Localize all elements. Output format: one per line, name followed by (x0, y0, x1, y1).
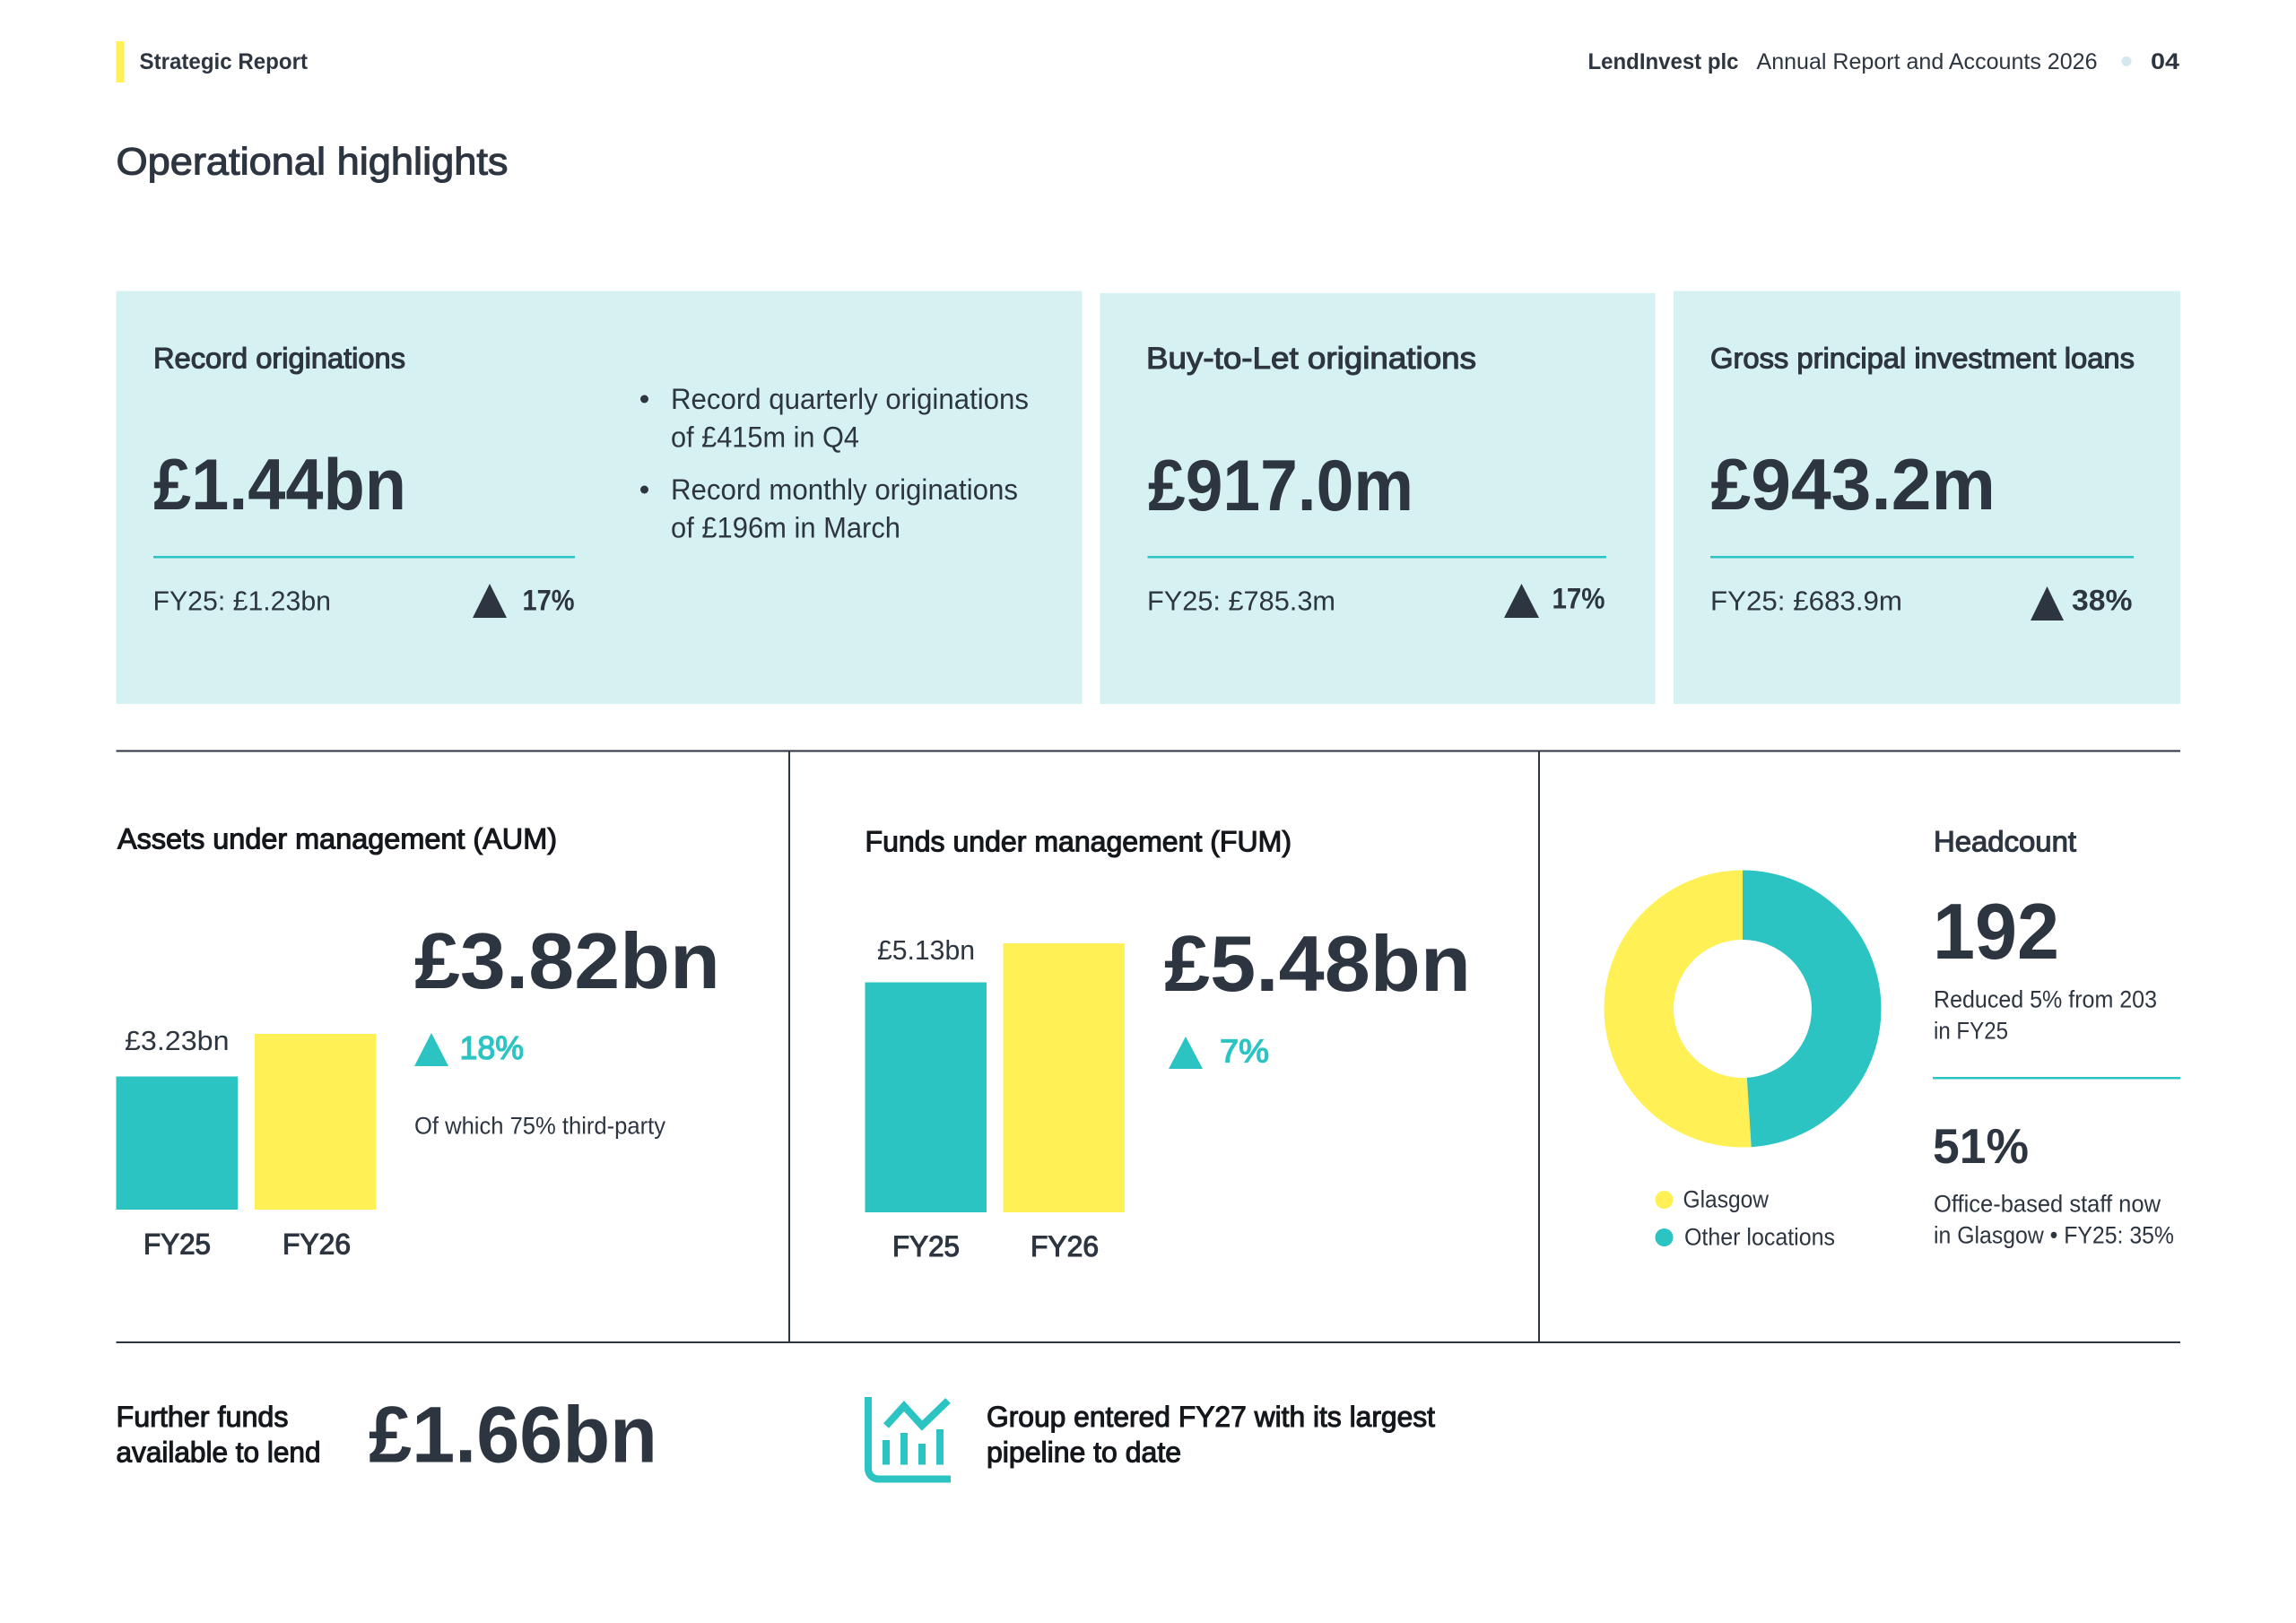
Glasgow share value: 51% (1933, 1118, 2029, 1174)
icon: growth chart (865, 1397, 951, 1483)
company name: LendInvest plc (1587, 49, 1739, 74)
panel: record originations (117, 291, 1082, 704)
heading: Record originations (153, 343, 405, 375)
Glasgow share note: in Glasgow • FY25: 35% (1934, 1221, 2174, 1248)
main value: £917.0m (1148, 446, 1413, 526)
bar chart: FUM: FY26 (1031, 1230, 1099, 1263)
pipeline text: pipeline to date (987, 1436, 1181, 1469)
prior year: FY25: £1.23bn (152, 585, 331, 617)
headcount value: 192 (1933, 887, 2059, 976)
pipeline text: Group entered FY27 with its largest (987, 1401, 1435, 1433)
icon: up triangle (2031, 586, 2064, 621)
divider (153, 556, 575, 558)
bar chart: AUM: FY25 (144, 1228, 211, 1261)
change: 18% (459, 1029, 524, 1066)
section label: Strategic Report (140, 49, 309, 74)
Glasgow share note: Office-based staff now (1934, 1191, 2161, 1218)
label: Further funds (117, 1401, 289, 1433)
main value: £943.2m (1711, 445, 1996, 525)
headcount note: in FY25 (1934, 1017, 2008, 1044)
divider (1933, 1077, 2180, 1080)
page header (117, 41, 2179, 82)
change: 17% (1552, 583, 1605, 615)
heading: Gross principal investment loans (1710, 343, 2135, 375)
change: 38% (2072, 585, 2133, 617)
headcount note: Reduced 5% from 203 (1934, 986, 2157, 1013)
bullet list: Record monthly originations (671, 473, 1018, 506)
icon: up triangle (473, 584, 507, 618)
bullet list (640, 383, 1029, 543)
heading: Assets under management (AUM) (117, 823, 557, 855)
bar chart: AUM: £3.23bn (125, 1025, 230, 1056)
panel: buy-to-let originations (1100, 293, 1656, 704)
donut chart (1604, 870, 1882, 1148)
panel: funds under management (865, 825, 1471, 1263)
report title: Annual Report and Accounts 2026 (1756, 49, 2097, 74)
bar chart: FUM (865, 934, 1125, 1263)
panel: headcount (1604, 825, 2180, 1250)
label: available to lend (117, 1436, 321, 1469)
legend (1656, 1185, 1835, 1250)
main value: £1.44bn (153, 445, 406, 525)
panel: assets under management (117, 823, 720, 1261)
heading: Buy-to-Let originations (1146, 342, 1476, 376)
divider (1710, 556, 2134, 558)
prior year: FY25: £683.9m (1710, 585, 1902, 617)
bar chart: FUM: £5.13bn (877, 934, 975, 966)
bullet list: Record quarterly originations (671, 383, 1029, 415)
value: £1.66bn (369, 1390, 657, 1480)
panel: gross principal investment loans (1674, 291, 2180, 704)
heading: Headcount (1934, 825, 2076, 857)
header separator dot (2122, 56, 2131, 66)
bar chart: FUM: FY25 (892, 1230, 960, 1263)
label (117, 1401, 321, 1469)
pipeline callout (865, 1397, 1435, 1483)
prior year: FY25: £785.3m (1147, 585, 1335, 617)
main value: £5.48bn (1164, 919, 1471, 1008)
change: 17% (522, 585, 574, 617)
pipeline text (987, 1401, 1435, 1469)
icon: up triangle (414, 1033, 448, 1066)
further funds callout (117, 1390, 657, 1480)
icon: up triangle (1169, 1037, 1203, 1069)
divider (1148, 556, 1606, 558)
note: Of which 75% third-party (414, 1112, 665, 1139)
main value: £3.82bn (414, 916, 720, 1005)
legend: Other locations (1684, 1223, 1835, 1250)
bar chart: AUM: FY26 (283, 1228, 351, 1261)
bullet list: of £196m in March (671, 511, 900, 543)
Glasgow share note (1934, 1191, 2174, 1248)
change: 7% (1220, 1033, 1269, 1069)
page title: Operational highlights (117, 140, 508, 183)
header accent bar (117, 41, 124, 82)
headcount note (1934, 986, 2157, 1044)
bullet list: of £415m in Q4 (671, 421, 859, 454)
icon: up triangle (1504, 584, 1539, 618)
legend: Glasgow (1683, 1185, 1769, 1212)
bar chart: AUM (117, 1025, 377, 1261)
heading: Funds under management (FUM) (865, 825, 1292, 857)
page number: 04 (2151, 49, 2179, 74)
